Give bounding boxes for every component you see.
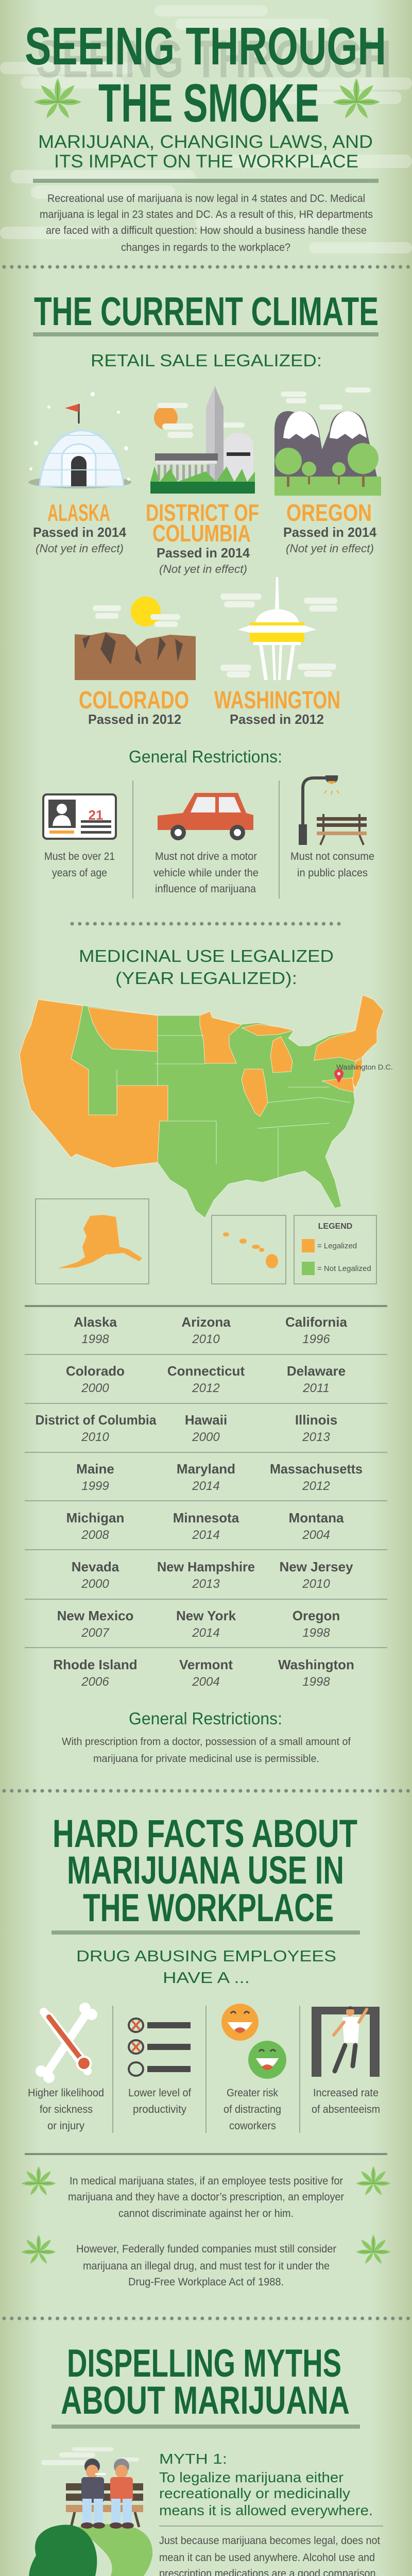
table: states and years: Illinois — [295, 1412, 337, 1428]
label: alaska: (Not yet in effect) — [36, 542, 124, 555]
subheading: drug abusing employees: HAVE A ... — [163, 1969, 250, 1987]
table: states and years: Delaware — [287, 1363, 346, 1379]
myth 1 — [159, 2451, 387, 2576]
table: states and years: 1998 — [302, 1626, 330, 1640]
subheading: medicinal use legalized — [79, 946, 334, 988]
table: states and years: Maine — [76, 1461, 114, 1477]
callout: medical marijuana states: cannot discriminate against her or him. — [118, 2208, 294, 2219]
label: district of columbia: DISTRICT OF — [146, 499, 259, 526]
myth 1: MYTH 1: — [159, 2451, 227, 2467]
icon: running out door — [312, 2006, 380, 2077]
fact texts: of absenteeism — [312, 2104, 380, 2115]
table: states and years: 2011 — [302, 1381, 330, 1395]
icon: oregon mountains — [274, 387, 381, 496]
restriction texts: Must not consume — [290, 851, 374, 862]
heading: hard facts — [53, 1812, 357, 1930]
illustration: people on bench with tree — [29, 2447, 152, 2576]
subheading: drug abusing employees — [76, 1947, 336, 1987]
table: states and years: New Hampshire — [157, 1559, 255, 1574]
table: states and years: District of Columbia — [35, 1412, 157, 1428]
callout: medical marijuana states — [21, 2166, 391, 2219]
table: states and years: 1999 — [81, 1479, 109, 1493]
table: states and years: Nevada — [72, 1559, 119, 1574]
label: oregon — [283, 499, 377, 555]
map: united states — [20, 995, 384, 1218]
text: prescription note — [62, 1736, 351, 1765]
fact texts: productivity — [133, 2104, 186, 2115]
table: states and years: Vermont — [179, 1657, 233, 1672]
table: states and years: Maryland — [177, 1461, 235, 1477]
fact texts: for sickness — [40, 2104, 93, 2115]
icon: bone and thermometer — [36, 2003, 97, 2083]
label: oregon: Passed in 2014 — [283, 524, 377, 540]
label: washington: WASHINGTON — [214, 687, 340, 714]
restriction texts: influence of marijuana — [155, 883, 256, 895]
table: states and years: Montana — [289, 1510, 344, 1526]
icon: laughing faces — [221, 2004, 286, 2079]
table: states and years: Arizona — [181, 1314, 231, 1330]
table: states and years: 1998 — [302, 1675, 330, 1689]
restriction texts: years of age — [52, 867, 107, 879]
fact texts: Greater risk — [227, 2087, 278, 2099]
title: THE SMOKE — [98, 73, 319, 133]
restriction texts — [44, 851, 374, 895]
fact texts: Lower level of — [128, 2087, 191, 2099]
restriction texts: vehicle while under the — [153, 867, 259, 879]
table: states and years: 2013 — [192, 1577, 220, 1591]
table: states and years: Connecticut — [167, 1363, 245, 1379]
myth 1: To legalize marijuana either — [159, 2469, 344, 2485]
restriction texts: Must be over 21 — [44, 851, 115, 862]
fact texts: Higher likelihood — [28, 2087, 104, 2099]
table: states and years: 2000 — [81, 1381, 109, 1395]
label: district of columbia: Passed in 2014 — [157, 545, 250, 561]
table: states and years: 2012 — [302, 1479, 330, 1493]
intro paragraph: are faced with a difficult question: How should a business handle these — [46, 225, 367, 236]
icon: id card: 21 — [89, 807, 103, 823]
table: states and years: 1998 — [81, 1332, 109, 1346]
callout: medical marijuana states: marijuana and they have a doctor’s prescription, an employer — [68, 2191, 344, 2203]
fact texts: Increased rate — [313, 2087, 379, 2099]
table: states and years: 2014 — [192, 1626, 220, 1640]
myth 1: Just because marijuana becomes legal, does not — [159, 2535, 380, 2547]
table: states and years: Michigan — [66, 1510, 124, 1526]
label: district of columbia — [146, 499, 259, 575]
label: washington: Passed in 2012 — [230, 711, 324, 727]
callout: federally funded companies: marijuana an illegal drug, and must test for it under the — [83, 2260, 330, 2272]
callout: federally funded companies: However, Federally funded companies must still consider — [76, 2243, 336, 2255]
heading: dispelling myths — [61, 2342, 350, 2422]
intro paragraph: changes in regards to the workplace? — [121, 242, 290, 253]
myth 1: recreationally or medicinally — [159, 2485, 350, 2501]
restriction texts: in public places — [297, 867, 368, 879]
subtitle: MARIJUANA, CHANGING LAWS, AND — [38, 132, 373, 152]
subtitle — [38, 132, 373, 172]
icon: street lamp and bench — [299, 775, 367, 845]
icon: washington space needle — [220, 577, 337, 680]
table: states and years: 2004 — [192, 1675, 220, 1689]
icon: id card — [43, 794, 116, 839]
label: alaska: Passed in 2014 — [33, 524, 127, 540]
subheading: general restrictions medicinal: General Restrictions: — [129, 1709, 282, 1728]
subheading: drug abusing employees: DRUG ABUSING EMPLOYEES — [76, 1947, 336, 1965]
table: states and years: 2000 — [192, 1430, 220, 1444]
table: states and years: 2008 — [81, 1528, 109, 1542]
table: states and years: 2006 — [81, 1675, 109, 1689]
callout: federally funded companies — [21, 2234, 391, 2288]
callout: medical marijuana states: In medical marijuana states, if an employee tests positive for — [70, 2175, 343, 2187]
text: prescription note: With prescription from a doctor, possession of a small amount of — [62, 1736, 351, 1748]
icon: colorado mountains — [75, 597, 196, 680]
table: states and years — [25, 1305, 387, 1689]
table: states and years: 1996 — [302, 1332, 330, 1346]
label: oregon: OREGON — [286, 499, 372, 526]
text: prescription note: marijuana for private medicinal use is permissible. — [93, 1753, 319, 1765]
subheading: medicinal use legalized: MEDICINAL USE LEGALIZED — [79, 946, 334, 965]
fact texts: coworkers — [229, 2120, 276, 2132]
label: washington — [214, 687, 340, 727]
table: states and years: New York — [176, 1608, 236, 1623]
map pin: washington dc — [334, 1063, 393, 1083]
icon: DC monuments — [150, 386, 255, 494]
subheading: medicinal use legalized: (YEAR LEGALIZED): — [115, 969, 297, 988]
table: states and years: Colorado — [66, 1363, 125, 1379]
fact texts: or injury — [47, 2120, 84, 2132]
label: colorado: Passed in 2012 — [88, 711, 181, 727]
table: states and years: Minnesota — [173, 1510, 239, 1526]
icon: leaf left — [34, 78, 81, 120]
map legend — [294, 1215, 376, 1284]
smoke background top — [0, 5, 412, 253]
myth 1: means it is allowed everywhere. — [159, 2502, 373, 2518]
table: states and years: Alaska — [74, 1314, 117, 1330]
table: states and years: Hawaii — [185, 1412, 227, 1428]
label: colorado — [79, 687, 189, 727]
fact texts: of distracting — [224, 2104, 281, 2115]
map legend: LEGEND — [318, 1222, 352, 1231]
myth 1: mean it can be used anywhere. Alcohol use and — [159, 2552, 375, 2564]
subheading: retail sale legalized: RETAIL SALE LEGALIZED: — [91, 351, 322, 370]
label: district of columbia: COLUMBIA — [152, 520, 251, 547]
label: district of columbia: (Not yet in effect) — [159, 563, 247, 575]
table: states and years: Rhode Island — [53, 1657, 138, 1672]
table: states and years: 2012 — [192, 1381, 220, 1395]
table: states and years: Massachusetts — [270, 1461, 363, 1477]
label: alaska: ALASKA — [47, 499, 110, 526]
table: states and years: New Jersey — [279, 1559, 353, 1574]
map pin: washington dc: Washington D.C. — [336, 1063, 393, 1071]
table: states and years: 2014 — [192, 1479, 220, 1493]
table: states and years: 2010 — [302, 1577, 330, 1591]
icon: checklist — [129, 2019, 191, 2076]
title — [25, 16, 391, 133]
table: states and years: 2000 — [81, 1577, 109, 1591]
restriction texts: Must not drive a motor — [155, 851, 257, 862]
intro paragraph: marijuana is legal in 23 states and DC. As a result of this, HR departments — [40, 209, 373, 221]
subheading: general restrictions: General Restrictions: — [129, 747, 282, 766]
table: states and years: 2007 — [81, 1626, 110, 1640]
intro paragraph — [40, 193, 373, 253]
icon: car — [158, 793, 253, 840]
label: oregon: (Not yet in effect) — [286, 542, 374, 555]
map legend: = Legalized — [317, 1242, 357, 1250]
table: states and years: 2010 — [81, 1430, 109, 1444]
callout: federally funded companies: Drug-Free Workplace Act of 1988. — [128, 2276, 284, 2288]
table: states and years: Washington — [278, 1657, 354, 1672]
table: states and years: Oregon — [293, 1608, 340, 1623]
subtitle: ITS IMPACT ON THE WORKPLACE — [54, 151, 358, 172]
intro paragraph: Recreational use of marijuana is now legal in 4 states and DC. Medical — [47, 193, 365, 205]
label: alaska — [33, 499, 127, 555]
fact texts — [28, 2087, 380, 2132]
label: colorado: COLORADO — [79, 687, 189, 714]
table: states and years: 2014 — [192, 1528, 220, 1542]
table: states and years: 2004 — [302, 1528, 330, 1542]
map inset: alaska — [36, 1199, 149, 1284]
icon: leaf right — [333, 78, 380, 120]
table: states and years: 2013 — [302, 1430, 330, 1444]
map inset: hawaii — [212, 1215, 286, 1284]
map legend: = Not Legalized — [317, 1264, 371, 1273]
table: states and years: 2010 — [192, 1332, 220, 1346]
table: states and years: New Mexico — [57, 1608, 133, 1623]
table: states and years: California — [285, 1314, 347, 1330]
icon: alaska igloo — [28, 392, 131, 488]
